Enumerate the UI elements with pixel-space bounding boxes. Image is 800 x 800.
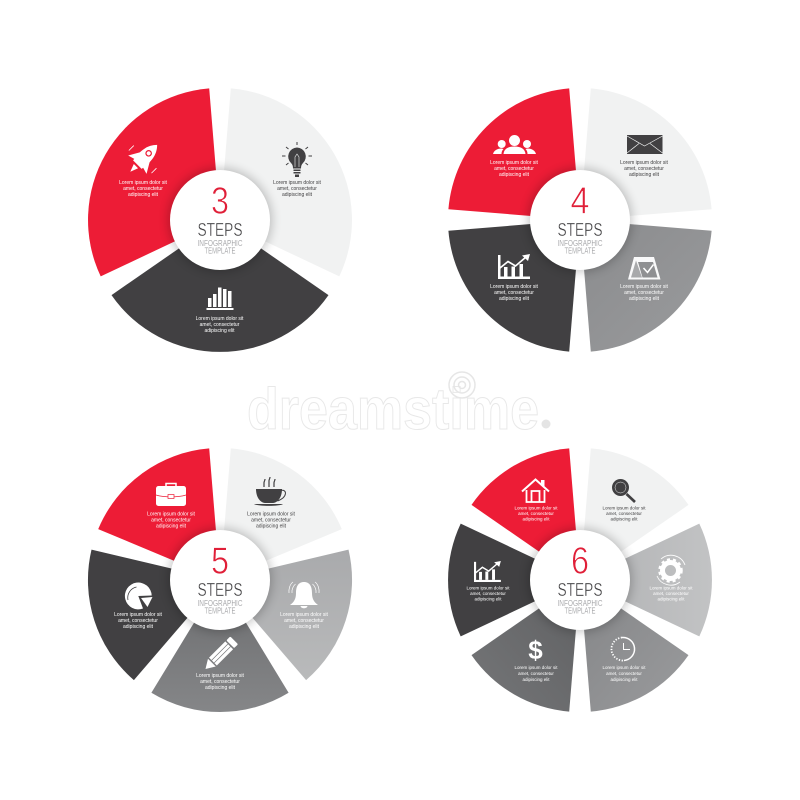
icon: people group — [493, 135, 536, 154]
text: step 3 of 5: adipiscing elit — [289, 624, 320, 630]
text: step 2 of 4: amet, consectetur — [624, 166, 664, 172]
wheel: 6 steps — [448, 448, 712, 712]
text: step 2 of 5: amet, consectetur — [251, 518, 291, 524]
text: step 2 of 3: amet, consectetur — [277, 186, 317, 192]
text: step 4 of 5: amet, consectetur — [200, 679, 240, 685]
centre hub: 6 steps: STEPS — [558, 580, 602, 600]
segments: 4 steps — [448, 88, 712, 352]
text: step 3 of 6: adipiscing elit — [657, 596, 685, 602]
icon: calendar with check — [628, 257, 660, 280]
text: step 3 of 5: amet, consectetur — [284, 618, 324, 624]
text: step 2 of 6: Lorem ipsum dolor sit — [602, 506, 646, 510]
icon: light bulb — [282, 142, 312, 177]
text: step 3 of 6: Lorem ipsum dolor sit — [649, 586, 693, 590]
icon: envelope — [627, 135, 662, 154]
text: step 6 of 6: Lorem ipsum dolor sit — [466, 586, 510, 590]
icon: bar chart — [206, 288, 234, 310]
wheel: 4 steps — [448, 88, 712, 352]
text: step 6 of 6: adipiscing elit — [474, 596, 502, 602]
icon: briefcase — [156, 484, 186, 506]
segments: 3 steps — [88, 88, 352, 352]
centre hub: 6 steps: INFOGRAPHIC — [558, 598, 603, 608]
text: step 3 of 4: amet, consectetur — [624, 290, 664, 296]
centre hub: 3 steps: TEMPLATE — [204, 246, 236, 256]
text: step 2 of 5: Lorem ipsum dolor sit — [247, 512, 296, 518]
text: step 2 of 4: Lorem ipsum dolor sit — [620, 160, 669, 166]
text: step 4 of 6: Lorem ipsum dolor sit — [602, 665, 646, 670]
text: step 3 of 3: Lorem ipsum dolor sit — [196, 316, 244, 322]
wheel: 5 steps — [88, 448, 352, 712]
text: step 1 of 4: amet, consectetur — [494, 166, 534, 172]
text: step 1 of 5: amet, consectetur — [151, 518, 191, 524]
text: step 4 of 5: Lorem ipsum dolor sit — [196, 673, 245, 679]
text: step 2 of 3: adipiscing elit — [282, 192, 313, 198]
text: step 5 of 5: amet, consectetur — [118, 618, 158, 624]
centre hub: 5 steps: 5 — [211, 540, 229, 582]
centre hub: 3 steps — [168, 168, 272, 272]
centre hub: 4 steps: TEMPLATE — [564, 246, 596, 256]
text: step 1 of 5: adipiscing elit — [156, 524, 187, 530]
text: step 4 of 6: adipiscing elit — [610, 677, 638, 682]
text: step 5 of 5: Lorem ipsum dolor sit — [114, 612, 163, 618]
text: step 2 of 4: adipiscing elit — [629, 172, 660, 178]
icon: gear with arrows — [657, 555, 685, 585]
centre hub: 4 steps: 4 — [570, 180, 590, 222]
text: step 2 of 5: adipiscing elit — [256, 524, 287, 530]
segments: 6 steps — [448, 448, 712, 712]
text: step 1 of 5: Lorem ipsum dolor sit — [147, 512, 196, 518]
icon: house — [522, 480, 549, 502]
text: step 3 of 4: Lorem ipsum dolor sit — [620, 284, 669, 290]
text: step 4 of 5: adipiscing elit — [205, 685, 236, 691]
segments: 5 steps — [88, 448, 352, 712]
centre hub: 5 steps: TEMPLATE — [204, 606, 236, 616]
centre hub: 4 steps — [528, 168, 632, 272]
text: step 3 of 5: Lorem ipsum dolor sit — [280, 612, 329, 618]
text: step 4 of 4: adipiscing elit — [499, 296, 530, 302]
text: step 1 of 3: adipiscing elit — [128, 192, 159, 198]
text: step 5 of 6: amet, consectetur — [518, 671, 554, 676]
text: step 2 of 6: adipiscing elit — [610, 516, 638, 522]
centre hub: 3 steps: 3 — [211, 180, 229, 222]
text: step 5 of 5: adipiscing elit — [123, 624, 154, 630]
icon: dollar sign: $ — [528, 635, 543, 665]
icon: bell — [289, 582, 319, 608]
text: step 3 of 4: adipiscing elit — [629, 296, 660, 302]
text: step 4 of 6: amet, consectetur — [606, 671, 642, 676]
centre hub: 5 steps: INFOGRAPHIC — [198, 598, 243, 608]
watermark: dreamstime: dreamstime — [247, 377, 539, 442]
text: step 5 of 6: adipiscing elit — [522, 677, 550, 682]
icon: magnifier — [612, 479, 635, 502]
text: step 1 of 4: Lorem ipsum dolor sit — [490, 160, 539, 166]
text: step 3 of 6: amet, consectetur — [653, 591, 689, 596]
centre hub: 5 steps: STEPS — [198, 580, 242, 600]
text: step 4 of 4: Lorem ipsum dolor sit — [490, 284, 539, 290]
centre hub: 3 steps: STEPS — [198, 220, 242, 240]
icon: pie chart — [125, 583, 152, 609]
text: step 1 of 3: amet, consectetur — [123, 186, 163, 192]
centre hub: 5 steps — [168, 528, 272, 632]
centre hub: 4 steps: STEPS — [558, 220, 602, 240]
text: step 4 of 4: amet, consectetur — [494, 290, 534, 296]
icon: rising chart small — [474, 561, 501, 582]
centre hub: 6 steps: TEMPLATE — [564, 606, 596, 616]
text: step 3 of 3: amet, consectetur — [200, 322, 240, 328]
centre hub: 3 steps: INFOGRAPHIC — [198, 238, 243, 248]
icon: clock — [611, 637, 635, 661]
text: step 2 of 3: Lorem ipsum dolor sit — [273, 180, 322, 186]
text: step 6 of 6: amet, consectetur — [470, 591, 506, 596]
text: step 5 of 6: Lorem ipsum dolor sit — [514, 665, 558, 670]
centre hub: 6 steps — [528, 528, 632, 632]
wheel: 3 steps — [88, 88, 352, 352]
icon: rising chart — [498, 254, 530, 279]
text: step 1 of 6: Lorem ipsum dolor sit — [514, 506, 558, 510]
text: step 1 of 6: adipiscing elit — [522, 516, 550, 522]
centre hub: 6 steps: 6 — [571, 540, 589, 582]
text: step 3 of 3: adipiscing elit — [204, 328, 235, 334]
text: step 2 of 6: amet, consectetur — [606, 511, 642, 516]
text: step 1 of 3: Lorem ipsum dolor sit — [119, 180, 168, 186]
icon: rocket — [119, 134, 168, 183]
text: step 1 of 6: amet, consectetur — [518, 511, 554, 516]
icon: pencil — [202, 636, 238, 673]
icon: coffee cup — [254, 477, 285, 506]
text: step 1 of 4: adipiscing elit — [499, 172, 530, 178]
centre hub: 4 steps: INFOGRAPHIC — [558, 238, 603, 248]
